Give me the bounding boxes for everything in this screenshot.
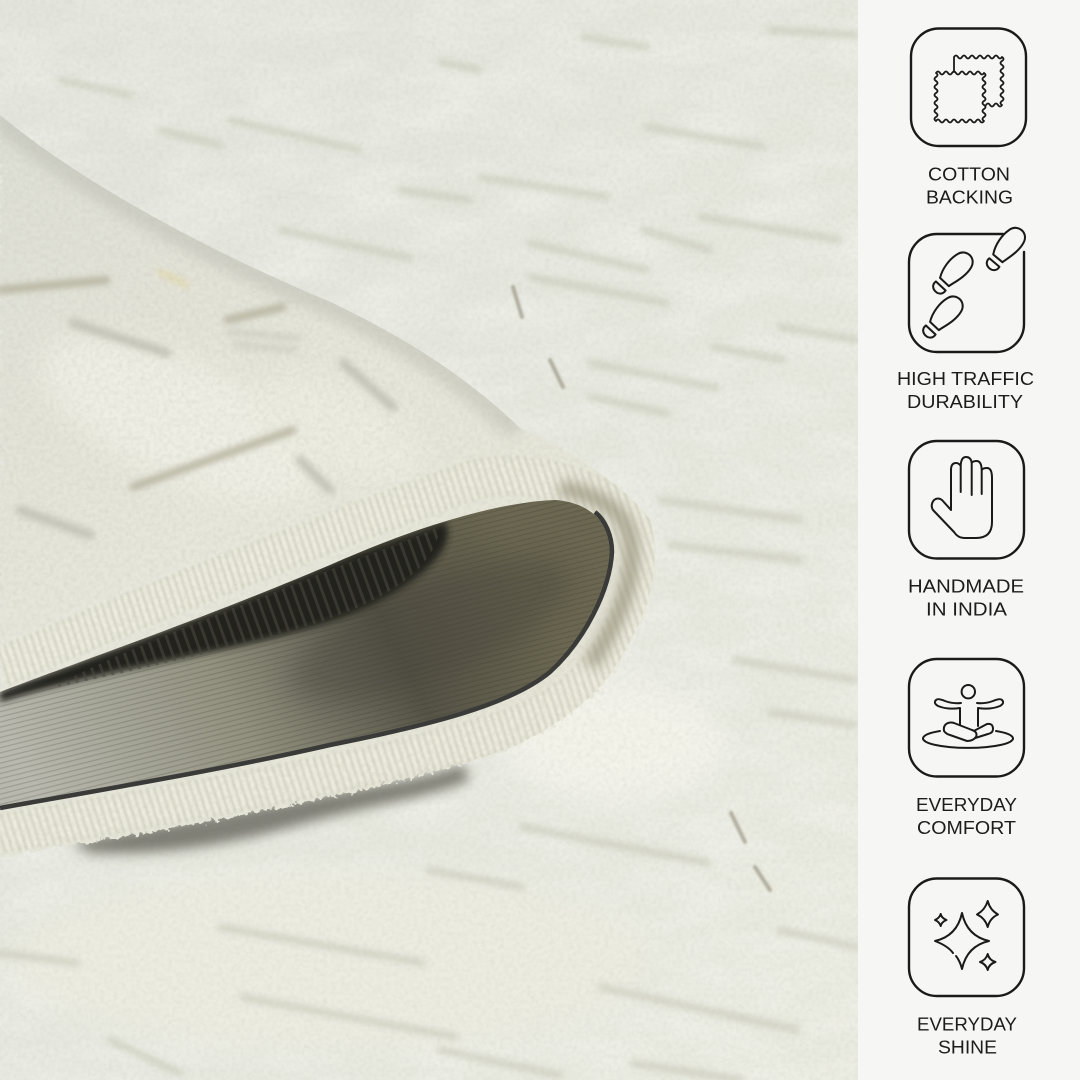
label: handmade in india: HANDMADE [908, 576, 1024, 596]
icon: cotton backing swatches [911, 28, 1026, 146]
label: high traffic durability [897, 368, 1034, 412]
photo: folded rug corner [0, 116, 656, 858]
label: everyday comfort [916, 794, 1017, 838]
label: handmade in india [908, 576, 1024, 620]
photo: cotton backing inside fold [0, 500, 614, 810]
label: cotton backing: COTTON [928, 164, 1010, 184]
label: everyday shine: EVERYDAY [917, 1014, 1017, 1034]
label: high traffic durability: HIGH TRAFFIC [897, 368, 1034, 389]
label: everyday shine: SHINE [938, 1036, 997, 1058]
label: everyday comfort: COMFORT [917, 817, 1016, 838]
panel: features sidebar [858, 0, 1080, 1080]
photo: rug background [0, 0, 860, 1080]
icon: hand [909, 441, 1024, 558]
icon: seated meditation figure [909, 659, 1024, 776]
label: cotton backing: BACKING [926, 186, 1013, 208]
decorative rim ribs [100, 467, 653, 838]
label: cotton backing [926, 164, 1013, 208]
label: everyday shine [917, 1014, 1017, 1058]
label: everyday comfort: EVERYDAY [916, 794, 1017, 815]
label: handmade in india: IN INDIA [926, 598, 1008, 620]
label: high traffic durability: DURABILITY [907, 391, 1023, 412]
icon: footprints [909, 223, 1029, 352]
icon: sparkles [909, 878, 1024, 996]
photo: shadow under fold [72, 764, 470, 853]
